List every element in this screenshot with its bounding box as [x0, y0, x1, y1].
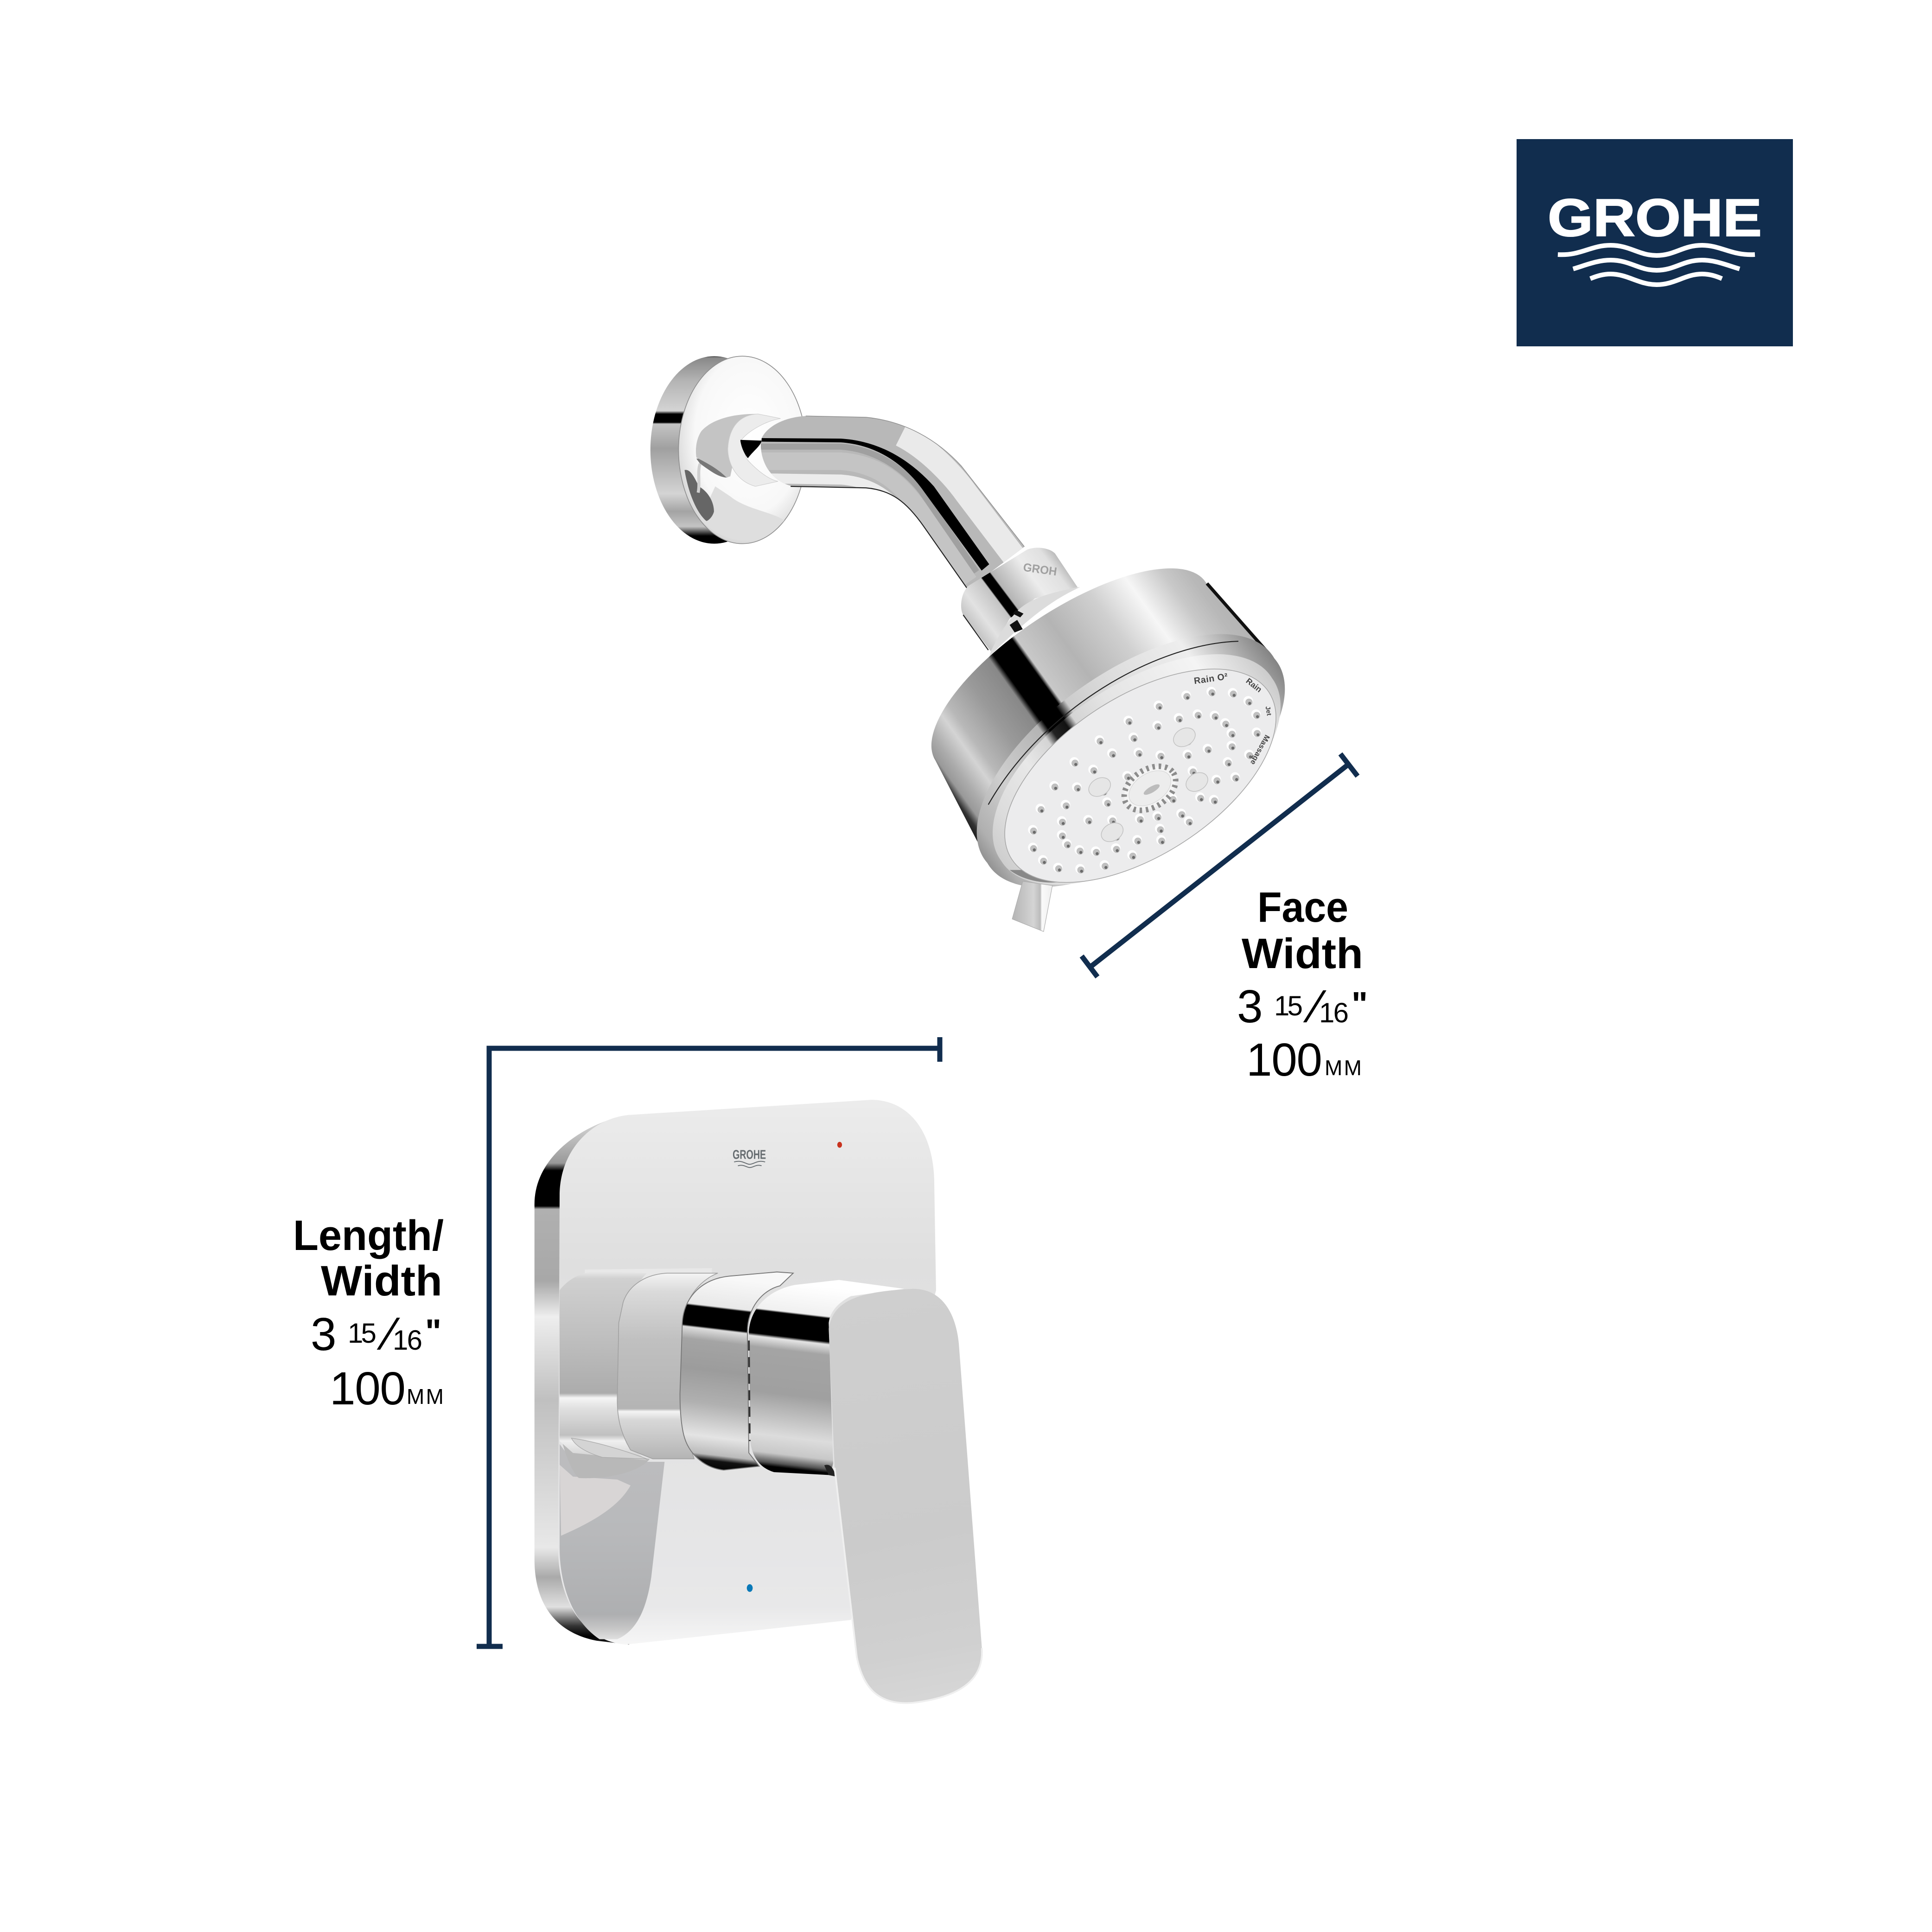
- wall flange: [650, 356, 806, 544]
- centre swirl nozzle: [1116, 757, 1184, 819]
- collar: [961, 548, 1080, 657]
- metric measurement: 100: [330, 1363, 406, 1415]
- inch measurement: ⁄: [1303, 981, 1326, 1033]
- inch measurement: 15: [348, 1318, 376, 1349]
- inch measurement: [311, 1308, 441, 1360]
- product: shower head: [931, 548, 1312, 931]
- dimension line: face width: [1082, 754, 1358, 977]
- head body: [931, 568, 1279, 880]
- metric measurement: [1246, 1034, 1362, 1086]
- spray setting labels: Jet: [1264, 706, 1273, 716]
- plate logo: [733, 1148, 766, 1167]
- inch measurement: 16: [393, 1325, 422, 1356]
- plate logo: GROHE: [733, 1148, 766, 1162]
- metric measurement: MM: [1325, 1056, 1362, 1080]
- metric measurement: MM: [407, 1384, 444, 1409]
- spray setting labels: Massage: [1249, 733, 1271, 766]
- large nozzles: [1085, 724, 1211, 846]
- spray setting labels: Rain: [1244, 676, 1264, 694]
- trim plate face: [558, 1100, 936, 1645]
- sleeve: [728, 414, 781, 486]
- plate shadow: [560, 1437, 664, 1639]
- product: shower arm and wall flange: [650, 356, 1024, 593]
- text: length and width label: Length/: [293, 1212, 444, 1259]
- product: single-handle valve trim: [535, 1100, 982, 1703]
- dimension bracket: length and width: [477, 1037, 940, 1647]
- collar mark: GROH: [1022, 561, 1058, 578]
- hot indicator: [837, 1142, 842, 1148]
- shower arm: [760, 416, 1024, 593]
- valve body segments: [560, 1268, 904, 1477]
- nozzle dots: [1031, 690, 1260, 873]
- inch measurement: 16: [1319, 997, 1349, 1028]
- metric measurement: [330, 1363, 444, 1415]
- lever behind the face edge: [1012, 881, 1052, 931]
- cold indicator: [747, 1584, 752, 1592]
- inch measurement: [1237, 981, 1368, 1033]
- head spray face with nozzles: [969, 626, 1312, 925]
- body shadow edge: [1207, 583, 1269, 653]
- text: length and width label: Width: [321, 1257, 442, 1305]
- text: length and width label: [293, 1212, 444, 1415]
- inch measurement: ": [1352, 985, 1368, 1023]
- logo: GROHE brand badge: [1517, 139, 1793, 346]
- spray setting labels: [1193, 671, 1273, 766]
- inch measurement: ": [425, 1312, 441, 1351]
- logo: GROHE brand badge: GROHE: [1548, 189, 1762, 248]
- inch measurement: 3: [311, 1308, 337, 1360]
- text: face width label: Width: [1242, 930, 1363, 977]
- trim plate edge: [535, 1115, 629, 1645]
- handle lever: [829, 1289, 982, 1703]
- text: face width label: [1237, 884, 1368, 1086]
- spray setting labels: Rain O²: [1193, 671, 1229, 686]
- arm socket: [740, 440, 762, 458]
- metric measurement: 100: [1246, 1034, 1322, 1086]
- head rim: [977, 634, 1285, 887]
- inch measurement: 3: [1237, 981, 1263, 1033]
- inch measurement: ⁄: [376, 1308, 400, 1360]
- text: face width label: Face: [1257, 884, 1348, 931]
- inch measurement: 15: [1274, 990, 1303, 1021]
